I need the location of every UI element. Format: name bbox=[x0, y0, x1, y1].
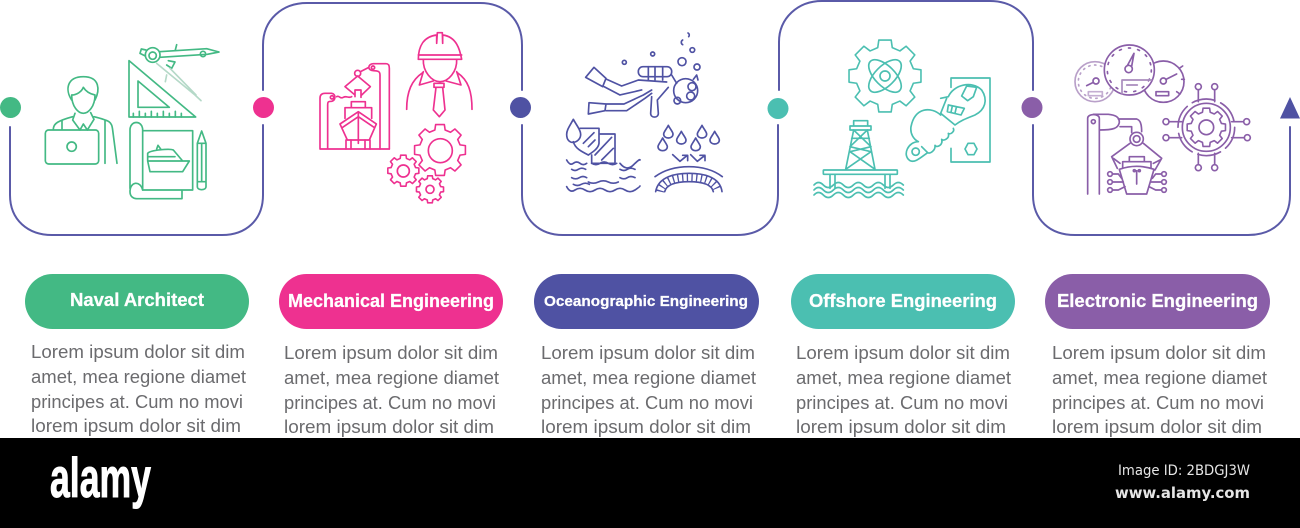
heading pill: Offshore Engineering bbox=[791, 274, 1015, 329]
heading pill: Electronic Engineering bbox=[1045, 274, 1270, 329]
step marker: green bbox=[0, 97, 21, 118]
text block: electronic engineering: lorem ipsum dolor sit dim bbox=[1052, 417, 1262, 437]
timeline frame bbox=[10, 1, 1290, 235]
step marker: blue bbox=[510, 97, 531, 118]
icon: ship crane, engineer and gears bbox=[320, 33, 472, 203]
icon: naval architect tools bbox=[45, 45, 219, 199]
icon: gauges, robotic ship arm and circuit gear bbox=[1075, 45, 1250, 194]
text block: electronic engineering: amet, mea regione diamet bbox=[1052, 368, 1267, 388]
text block: oceanographic engineering: lorem ipsum dolor sit dim bbox=[541, 417, 751, 437]
text block: mechanical engineering: principes at. Cum no movi bbox=[284, 393, 496, 413]
panel: mechanical engineering bbox=[279, 33, 503, 437]
text block: offshore engineering: amet, mea regione diamet bbox=[796, 368, 1011, 388]
website: www.alamy.com bbox=[1115, 484, 1250, 502]
text block: mechanical engineering: amet, mea regione diamet bbox=[284, 368, 499, 388]
text block: naval architect: principes at. Cum no movi bbox=[31, 392, 243, 412]
step marker: pink bbox=[253, 97, 274, 118]
step marker: teal bbox=[768, 98, 788, 119]
heading pill: Offshore Engineering: Offshore Engineering bbox=[809, 291, 997, 311]
heading pill: Naval Architect: Naval Architect bbox=[70, 290, 204, 310]
text block: oceanographic engineering: amet, mea regione diamet bbox=[541, 368, 756, 388]
text block: oceanographic engineering: principes at. Cum no movi bbox=[541, 393, 753, 413]
arrow: end triangle bbox=[1280, 97, 1300, 118]
heading pill: Naval Architect bbox=[25, 274, 249, 329]
text block: naval architect bbox=[31, 342, 246, 436]
text block: oceanographic engineering: Lorem ipsum dolor sit dim bbox=[541, 343, 755, 363]
text block: naval architect: amet, mea regione diamet bbox=[31, 367, 246, 387]
text block: mechanical engineering bbox=[284, 343, 499, 437]
logo: alamy: alamy bbox=[50, 446, 151, 509]
image id: Image ID: 2BDGJ3W bbox=[1118, 463, 1250, 479]
text block: offshore engineering: Lorem ipsum dolor sit dim bbox=[796, 343, 1010, 363]
text block: offshore engineering: lorem ipsum dolor sit dim bbox=[796, 417, 1006, 437]
panel: naval architect bbox=[25, 45, 249, 436]
panel: offshore engineering bbox=[791, 40, 1015, 437]
icon: atom gear, wrench and oil rig bbox=[814, 40, 990, 197]
text block: mechanical engineering: lorem ipsum dolor sit dim bbox=[284, 417, 494, 437]
text block: offshore engineering: principes at. Cum no movi bbox=[796, 393, 1008, 413]
heading pill: Electronic Engineering: Electronic Engineering bbox=[1057, 291, 1258, 311]
text block: naval architect: lorem ipsum dolor sit dim bbox=[31, 416, 241, 436]
text block: offshore engineering bbox=[796, 343, 1011, 437]
heading pill: Oceanographic Engineering: Oceanographic Engineering bbox=[544, 293, 748, 310]
heading pill: Mechanical Engineering bbox=[279, 274, 503, 329]
panel: oceanographic engineering bbox=[534, 33, 759, 437]
text block: electronic engineering: principes at. Cum no movi bbox=[1052, 393, 1264, 413]
step marker: purple bbox=[1022, 97, 1042, 118]
watermark band bbox=[0, 438, 1300, 528]
heading pill: Oceanographic Engineering bbox=[534, 274, 759, 329]
text block: electronic engineering bbox=[1052, 343, 1267, 437]
icon: diver, waves and rain bbox=[567, 33, 722, 192]
text block: mechanical engineering: Lorem ipsum dolor sit dim bbox=[284, 343, 498, 363]
text block: electronic engineering: Lorem ipsum dolor sit dim bbox=[1052, 343, 1266, 363]
panel: electronic engineering bbox=[1045, 45, 1270, 437]
text block: oceanographic engineering bbox=[541, 343, 756, 437]
text block: naval architect: Lorem ipsum dolor sit dim bbox=[31, 342, 245, 362]
heading pill: Mechanical Engineering: Mechanical Engineering bbox=[288, 291, 494, 311]
